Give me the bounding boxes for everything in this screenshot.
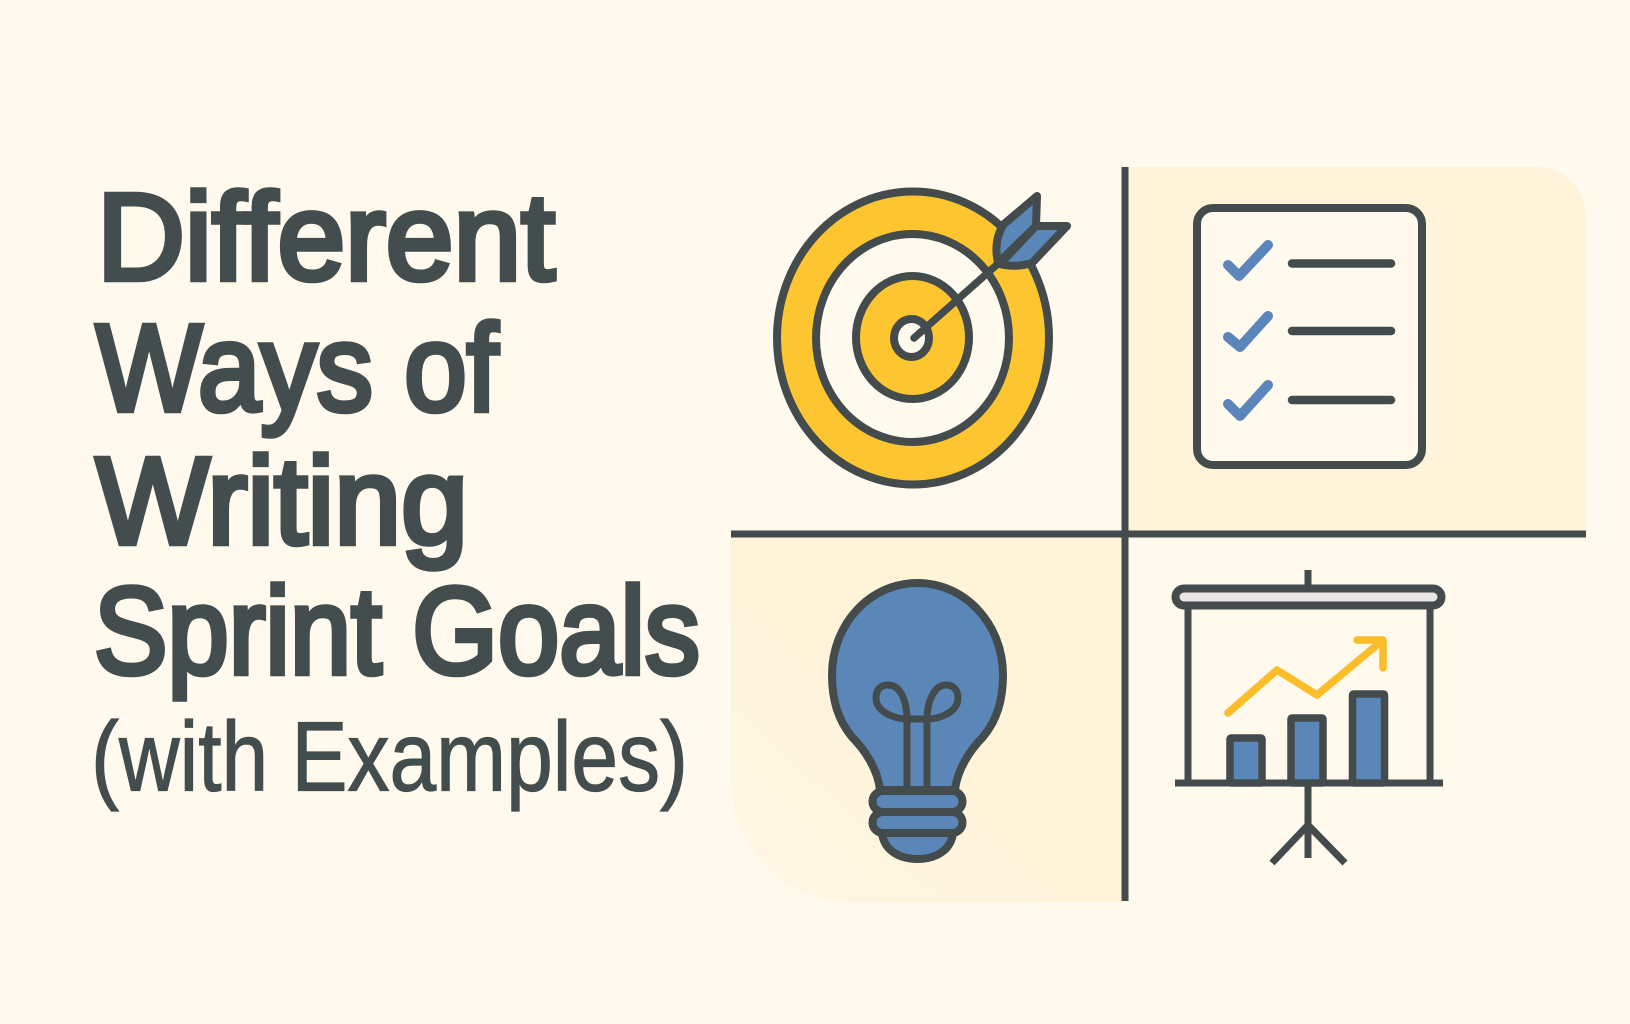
bulb glass xyxy=(832,583,1003,790)
projector roller xyxy=(1176,588,1442,606)
icon: target with arrow xyxy=(777,192,1067,484)
heading line: Sprint Goals: Sprint Goals xyxy=(94,564,700,700)
title block xyxy=(91,170,700,812)
heading line: Writing: Writing xyxy=(96,434,468,570)
panel: top right tinted quadrant xyxy=(1128,167,1586,531)
top hanger post xyxy=(1304,570,1312,586)
base line xyxy=(1175,780,1443,786)
arrow shaft xyxy=(914,262,1000,338)
horizontal divider xyxy=(731,530,1586,538)
target inner yellow ring xyxy=(856,276,969,399)
icon: checklist xyxy=(1197,208,1422,465)
icon: light bulb xyxy=(832,583,1003,859)
subheading: with Examples: (with Examples) xyxy=(91,702,688,812)
heading line: Ways of: Ways of xyxy=(96,300,499,438)
target outer yellow ring xyxy=(777,192,1049,484)
screen sides xyxy=(1188,606,1430,783)
icon: presentation board with chart xyxy=(1175,570,1443,863)
checklist card xyxy=(1197,208,1422,465)
bulb cap xyxy=(882,833,953,859)
bulb base rings xyxy=(872,791,962,833)
bar chart xyxy=(1230,694,1384,783)
checklist lines xyxy=(1292,264,1391,400)
target white ring xyxy=(816,234,1009,442)
trend arrow xyxy=(1228,640,1383,713)
bulb filament xyxy=(876,685,958,788)
panel: bottom left tinted quadrant xyxy=(731,537,1122,902)
vertical divider xyxy=(1122,167,1128,901)
target bullseye xyxy=(894,319,929,357)
check marks xyxy=(1228,245,1268,416)
heading line: Different: Different xyxy=(97,170,555,306)
tripod stand xyxy=(1272,783,1345,863)
arrow fletching xyxy=(996,196,1067,266)
